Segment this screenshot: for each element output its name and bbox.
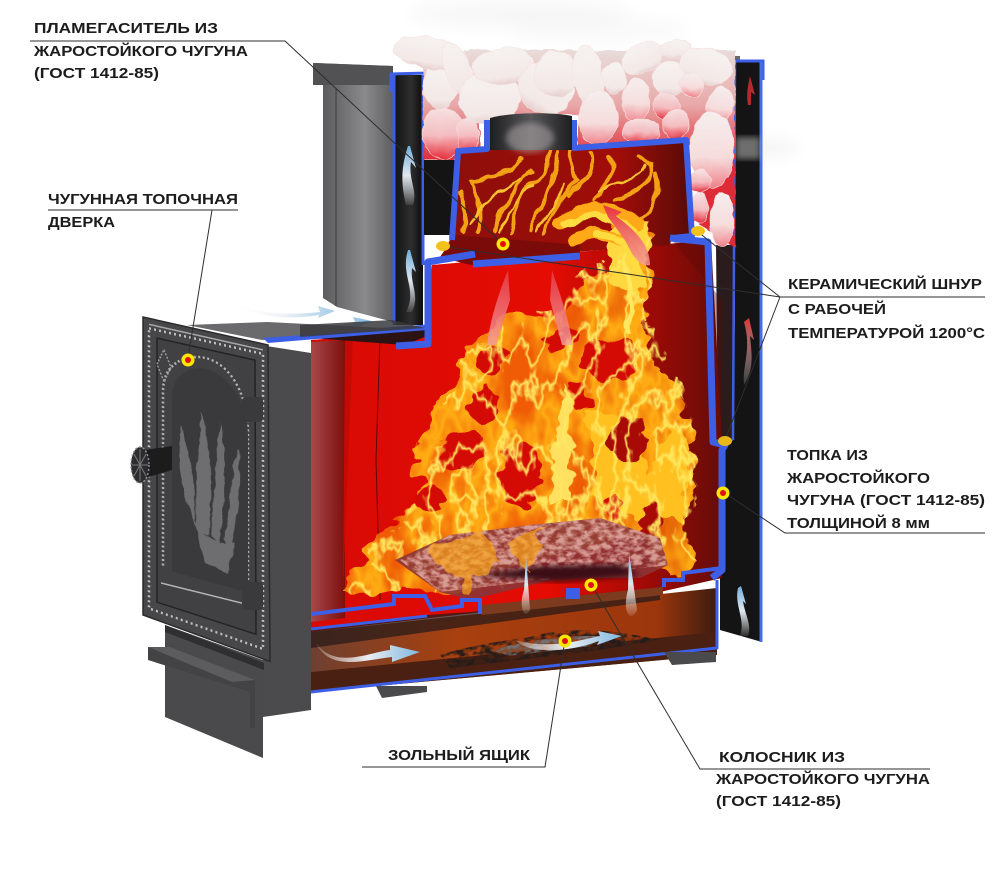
label: grate <box>715 749 930 810</box>
label: firebox: ЧУГУНА (ГОСТ 1412-85) <box>787 492 985 509</box>
support feet <box>376 652 716 698</box>
right outer column <box>716 60 763 642</box>
upper chamber <box>440 140 722 440</box>
label: door: ЧУГУННАЯ ТОПОЧНАЯ <box>48 191 238 208</box>
ash box front and handle <box>148 625 311 758</box>
ash chamber <box>311 588 717 692</box>
flame body glow <box>345 215 695 590</box>
flue panel grey <box>313 63 393 322</box>
label: door <box>48 191 238 231</box>
label: door: ДВЕРКА <box>48 214 115 231</box>
flame red gaps <box>416 330 660 538</box>
flame orange wisps <box>345 215 695 590</box>
firewood logs <box>395 518 668 600</box>
steam <box>410 0 798 157</box>
label: grate: (ГОСТ 1412-85) <box>716 793 841 810</box>
marker dots <box>182 226 732 648</box>
label: firebox <box>786 447 985 532</box>
label: flame arrester: ПЛАМЕГАСИТЕЛЬ ИЗ <box>34 20 218 37</box>
label: grate: ЖАРОСТОЙКОГО ЧУГУНА <box>715 770 930 788</box>
sauna rocks <box>391 31 737 248</box>
leader lines <box>30 41 985 769</box>
grey back strip behind rocks <box>590 54 740 70</box>
chimney collar <box>490 113 572 150</box>
door handle <box>131 446 172 483</box>
upper chamber flame licks <box>458 148 657 330</box>
label: firebox: ТОПКА ИЗ <box>787 447 868 464</box>
label: flame arrester: ЖАРОСТОЙКОГО ЧУГУНА <box>33 42 248 60</box>
door hinges <box>242 397 263 610</box>
convection arrows <box>230 205 650 662</box>
door diamond ornament <box>157 348 171 383</box>
smoke in collar <box>506 123 554 153</box>
label: grate: КОЛОСНИК ИЗ <box>719 749 845 766</box>
label: ceramic cord <box>788 275 985 342</box>
stove cutaway illustration <box>131 31 763 758</box>
label: flame arrester <box>33 20 248 82</box>
door flame relief <box>179 407 240 577</box>
label: ash box: ЗОЛЬНЫЙ ЯЩИК <box>388 746 531 764</box>
flames <box>345 148 695 590</box>
dark space behind upper chamber <box>424 160 457 235</box>
label: firebox: ЖАРОСТОЙКОГО <box>786 469 930 487</box>
door box side and top <box>187 320 427 650</box>
flames over logs <box>425 525 545 590</box>
label: ceramic cord: ТЕМПЕРАТУРОЙ 1200°C <box>788 324 985 342</box>
label: flame arrester: (ГОСТ 1412-85) <box>34 65 159 82</box>
label: ceramic cord: С РАБОЧЕЙ <box>788 300 886 318</box>
left convection column <box>391 73 429 325</box>
firebox door <box>143 317 270 661</box>
steel blue section outline <box>262 120 725 692</box>
flame yellow core <box>548 205 690 520</box>
flame bright veins <box>345 215 695 590</box>
label: ceramic cord: КЕРАМИЧЕСКИЙ ШНУР <box>788 275 982 293</box>
grate <box>312 568 722 615</box>
label: firebox: ТОЛЩИНОЙ 8 мм <box>787 514 930 532</box>
firebox back wall <box>311 240 722 632</box>
